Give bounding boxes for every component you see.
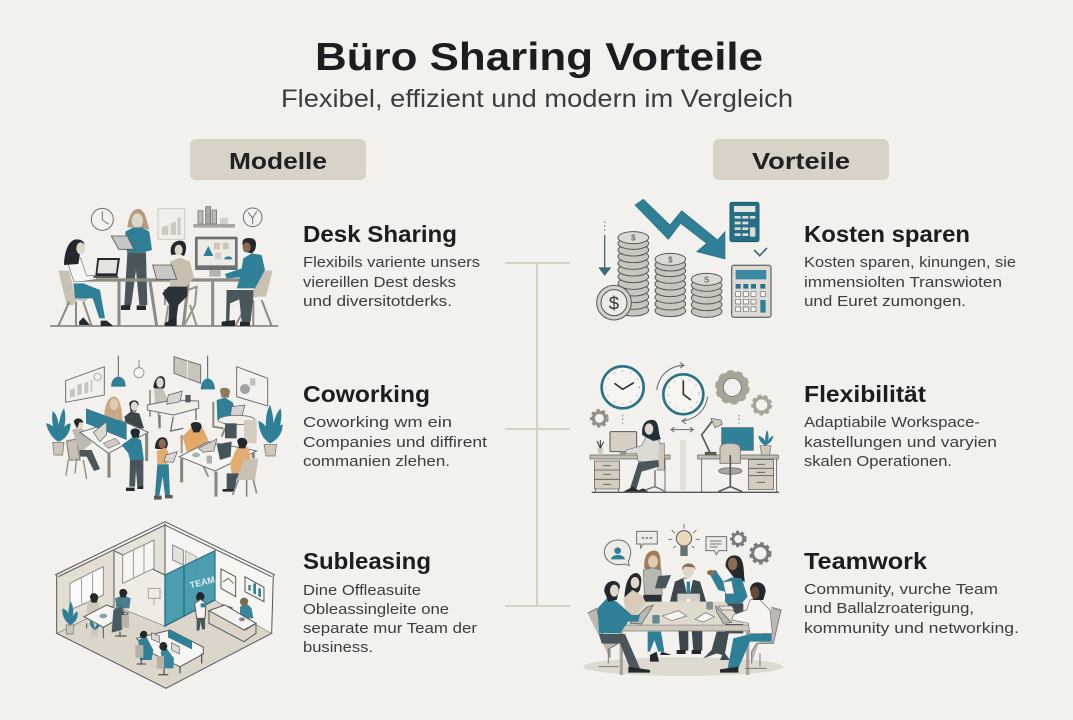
- block: Teamwork: kommunity und networking.: [804, 621, 1019, 637]
- block: Teamwork: und Ballalzroaterigung,: [804, 601, 974, 617]
- block: Desk Sharing: Desk Sharing: [303, 221, 457, 247]
- speech bubble lines: [706, 537, 727, 555]
- illustration: teamwork: [583, 524, 783, 676]
- wall frames: [173, 545, 264, 602]
- room walls: [55, 522, 275, 633]
- plants: [62, 602, 100, 637]
- plant right: [258, 405, 283, 456]
- speech bubble dots: [637, 531, 657, 548]
- falling teal arrow: [635, 199, 725, 259]
- wall chart poster: [158, 209, 185, 239]
- block: Coworking: commanien zlehen.: [303, 454, 450, 470]
- room floor: [57, 600, 272, 688]
- block: Flexibilität: skalen Operationen.: [804, 454, 952, 470]
- illustration: subleasing isometric office: [55, 522, 275, 688]
- illustration: cost saving: [597, 199, 771, 320]
- left desk: [590, 432, 670, 492]
- block: Flexibilität: Adaptiabile Workspace-: [804, 415, 980, 431]
- person: woman seated left: [623, 573, 672, 662]
- illustration: desk sharing: [50, 207, 278, 326]
- plant left: [46, 408, 71, 455]
- desk: [82, 278, 247, 326]
- standing man: [195, 592, 206, 631]
- block: Kosten sparen: und Euret zumongen.: [804, 294, 966, 310]
- wall clock right: [243, 208, 262, 227]
- desk left with divider: [80, 408, 148, 478]
- person: woman standing with tablet: [154, 437, 177, 500]
- floor line: [592, 490, 779, 494]
- monitor on desk: [195, 237, 238, 277]
- person: man at round table right: [213, 388, 257, 443]
- clock centre: [663, 374, 703, 414]
- desk right with people: [179, 422, 258, 497]
- pendant lamp teal right: [201, 356, 215, 389]
- block: Flexibilität: Flexibilität: [804, 381, 926, 407]
- person: seated woman left: [58, 239, 120, 326]
- person: woman standing right: [707, 555, 748, 633]
- gears: [731, 532, 770, 563]
- person: man seated back left: [66, 418, 100, 479]
- person: woman at top desk: [147, 376, 199, 431]
- person: seated pair behind divider: [104, 397, 144, 428]
- clock left: [602, 366, 644, 408]
- block: Subleasing: business.: [303, 640, 373, 656]
- book shelf: [193, 207, 235, 228]
- check mark: [754, 248, 767, 256]
- person: seated man right: [222, 238, 273, 326]
- block: Flexibilität: [804, 381, 997, 470]
- coin stack small: S: [704, 275, 710, 284]
- coin stack medium: $: [668, 255, 673, 264]
- floor shadow: [583, 657, 783, 676]
- person: man right in white: [720, 582, 781, 673]
- person: man standing teal: [122, 428, 144, 491]
- wall picture centre: [174, 357, 201, 383]
- block: Coworking: [303, 381, 487, 470]
- down arrow: [598, 222, 611, 276]
- block: Flexibilität: kastellungen und varyien: [804, 435, 997, 451]
- heading pill: Vorteile: [713, 139, 889, 180]
- person: standing woman with tablet: [111, 209, 152, 310]
- heading pill: Modelle: [190, 139, 366, 180]
- block: Desk Sharing: und diversitotderks.: [303, 294, 452, 310]
- person: seated woman centre: [153, 241, 197, 326]
- person: woman seated right legs: [703, 632, 730, 660]
- block: Teamwork: [804, 548, 1019, 637]
- block: Subleasing: Subleasing: [303, 548, 431, 574]
- floor line: [50, 324, 278, 328]
- heading pill: Vorteile: Vorteile: [752, 148, 850, 174]
- block: Subleasing: Obleassingleite one: [303, 602, 449, 618]
- block: Kosten sparen: Kosten sparen, kinungen, sie: [804, 255, 1016, 271]
- large calculator: [732, 265, 771, 317]
- dotted connectors: [623, 415, 739, 426]
- speech bubble people icon: [604, 540, 631, 566]
- workstation group: [135, 629, 203, 675]
- illustration: coworking: [46, 356, 283, 500]
- block: Desk Sharing: viereillen Dest desks: [303, 275, 456, 291]
- meeting table group: [84, 589, 131, 638]
- block: Coworking: Coworking wm ein: [303, 415, 452, 431]
- wall board right: [237, 367, 268, 406]
- block: Coworking: Companies und diffirent: [303, 435, 487, 451]
- block: Subleasing: separate mur Team der: [303, 621, 477, 637]
- heading pill: Modelle: Modelle: [229, 148, 327, 174]
- block: Kosten sparen: immensiolten Transwioten: [804, 275, 1002, 291]
- block: Desk Sharing: Flexibils variente unsers: [303, 255, 480, 271]
- table: [618, 602, 753, 675]
- block: Desk Sharing: [303, 221, 480, 310]
- dollar coin: $: [609, 292, 620, 313]
- central connector lines: [505, 263, 570, 606]
- coin stack medium: [655, 253, 686, 317]
- gear small right: [752, 396, 771, 414]
- subtitle: Flexibel, effizient und modern im Vergleich: [281, 85, 793, 113]
- pendant lamp white: [134, 360, 144, 378]
- reception desk: [209, 598, 256, 642]
- illustration: flexibility: [590, 363, 779, 492]
- block: Teamwork: Teamwork: [804, 548, 927, 574]
- teal glass partition: TEAM: [189, 574, 216, 590]
- coin stack small: [691, 273, 722, 317]
- block: Subleasing: Dine Offleasuite: [303, 583, 421, 599]
- wall board left: [66, 367, 104, 402]
- coin stack tall: [618, 232, 649, 316]
- person: man in suit centre: [670, 563, 707, 654]
- right desk: [698, 418, 778, 492]
- gear large: [717, 372, 748, 403]
- rotation arrows: [657, 363, 708, 424]
- teal glass partition: [165, 551, 216, 626]
- double arrow: [671, 427, 693, 432]
- light bulb idea: [668, 524, 700, 556]
- title: Büro Sharing Vorteile: [315, 36, 763, 79]
- person: man left in teal: [588, 581, 650, 673]
- small calculator: [730, 202, 759, 242]
- block: Subleasing: [303, 548, 477, 656]
- wall clock left: [91, 208, 113, 230]
- dollar coin: [597, 285, 631, 320]
- coin stack tall: $: [631, 234, 636, 243]
- block: Coworking: Coworking: [303, 381, 430, 407]
- person: woman with tablet: [643, 551, 671, 603]
- seated woman: [623, 420, 664, 492]
- block: Kosten sparen: Kosten sparen: [804, 221, 970, 247]
- block: Kosten sparen: [804, 221, 1016, 310]
- block: Teamwork: Community, vurche Team: [804, 582, 998, 598]
- pendant lamp teal left: [111, 356, 126, 387]
- gear small left: [591, 410, 608, 427]
- faint column: [680, 440, 686, 490]
